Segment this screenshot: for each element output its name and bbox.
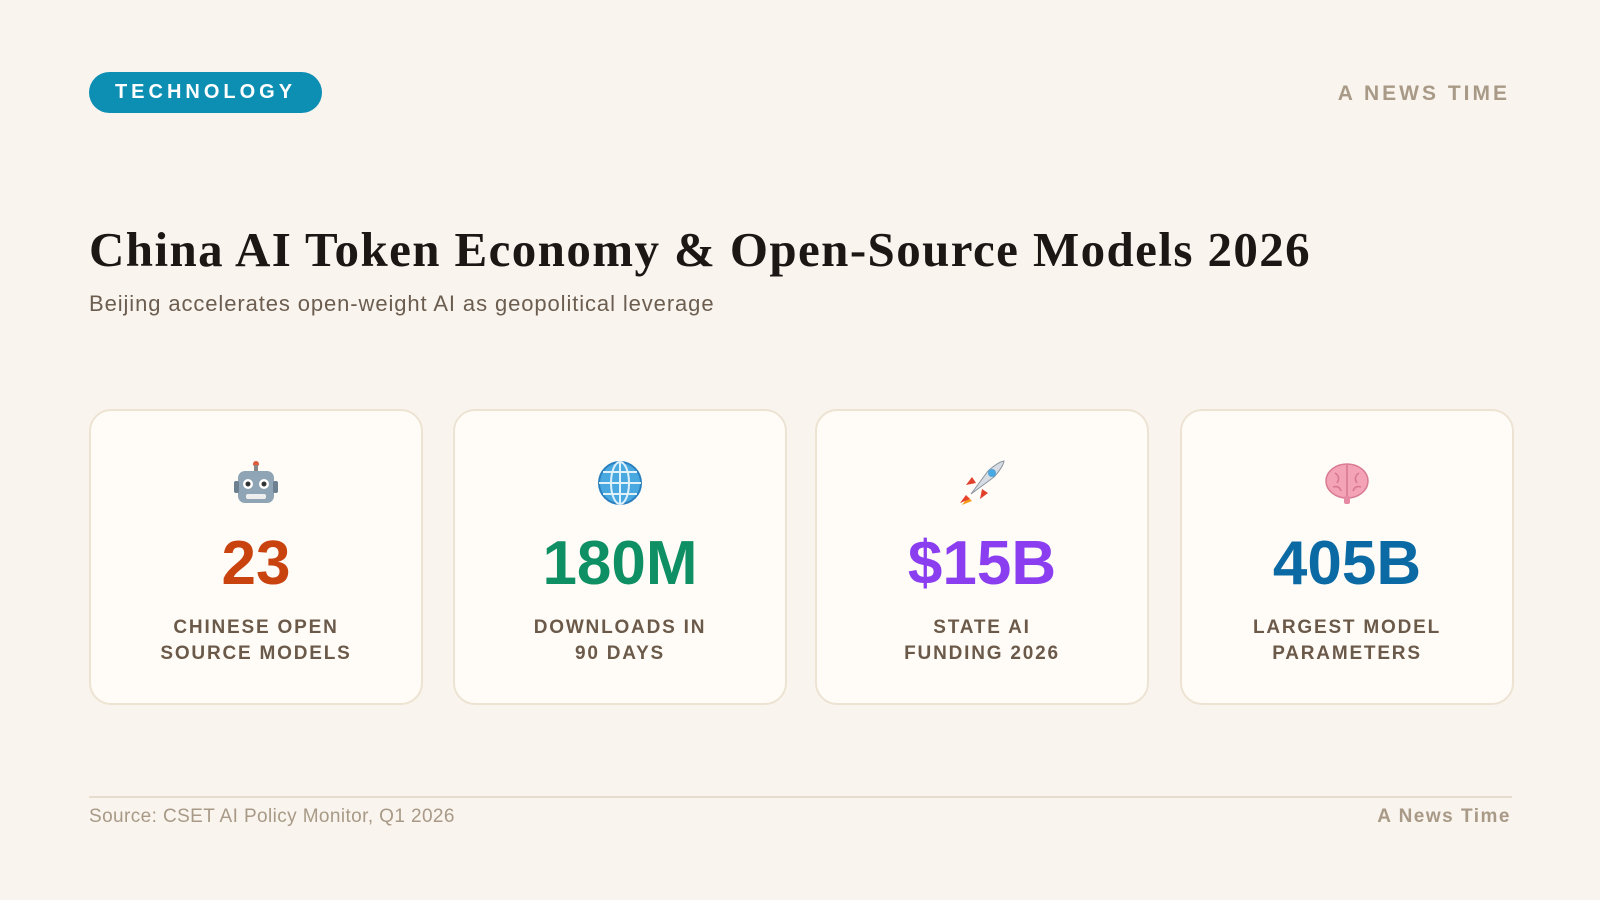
- stat label: SOURCE MODELS: [160, 643, 352, 664]
- icon: robot: [234, 461, 278, 503]
- icon: rocket: [960, 460, 1005, 505]
- card: parameters: [1180, 409, 1514, 705]
- stat number: 405B: [1273, 529, 1421, 598]
- icon: globe: [598, 461, 642, 505]
- stat number: 23: [222, 529, 290, 598]
- title: China AI Token Economy & Open-Source Models 2026: [89, 222, 1311, 277]
- card: open source models: [89, 409, 423, 705]
- stat label: [1253, 617, 1441, 664]
- subtitle: Beijing accelerates open-weight AI as geopolitical leverage: [89, 291, 714, 316]
- stat label: [534, 617, 706, 664]
- category pill: TECHNOLOGY: [115, 81, 296, 103]
- brand top right: A NEWS TIME: [1338, 82, 1510, 105]
- category pill: [89, 72, 322, 113]
- stat label: DOWNLOADS IN: [534, 617, 706, 638]
- stat label: [904, 617, 1060, 664]
- stat label: LARGEST MODEL: [1253, 617, 1441, 638]
- stat label: STATE AI: [933, 617, 1031, 638]
- stat label: [160, 617, 352, 664]
- stat label: 90 DAYS: [575, 643, 665, 664]
- card: state funding: [815, 409, 1149, 705]
- stat number: 180M: [542, 529, 698, 598]
- icon: brain: [1325, 463, 1369, 504]
- stat label: PARAMETERS: [1272, 643, 1422, 664]
- source footer: Source: CSET AI Policy Monitor, Q1 2026: [89, 806, 455, 827]
- stat label: CHINESE OPEN: [173, 617, 339, 638]
- stat label: FUNDING 2026: [904, 643, 1060, 664]
- card: downloads: [453, 409, 787, 705]
- stat number: $15B: [908, 529, 1056, 598]
- footer brand: A News Time: [1377, 806, 1511, 827]
